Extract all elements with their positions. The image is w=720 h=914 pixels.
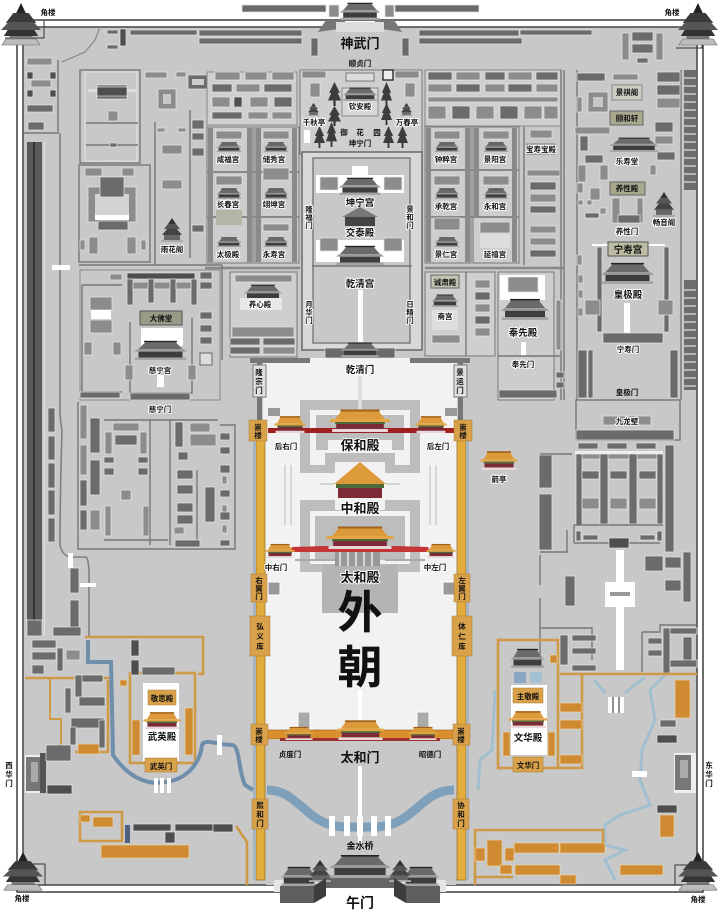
red wall north with hall: 保和殿: 后右门 [275,441,297,451]
big characters: 外朝 [337,587,383,693]
gate: 西华门: 门 [5,778,13,788]
plaque: 协和门: 和 [457,809,465,819]
plaque: 崇楼 south-east: 楼 [457,734,465,744]
western six palaces: 永寿宫 [263,249,285,259]
corner tower south-west: 角楼 [14,893,30,903]
hall: 武英殿: 武英殿 [148,731,177,743]
gate: 东华门 and neighbours: 门 [705,778,713,788]
Ningshou compound: east palace: 养性门 [616,226,638,236]
north gate: 神武门: 顺贞门 [349,58,371,68]
western six palaces [207,127,299,263]
hall: 文华殿: 文华殿 [514,732,543,744]
west area: 武英殿 [25,620,253,793]
hall: 太和殿 and terrace: 中右门 [265,562,287,572]
eastern six palaces: 永和宫 [484,201,506,211]
hall: 文华殿 [508,711,548,744]
hall: 乐寿堂 [609,138,659,166]
corner tower south-east: 角楼 [690,894,706,904]
golden corridors west and east [253,430,469,880]
western six palaces: 翊坤宫 [263,199,285,209]
side gates: 门 [305,315,313,325]
western six palaces: 储秀宫 [263,154,285,164]
养心殿 compound: 养心殿 [249,299,272,309]
gates 隆宗门 and 景运门: 隆 [255,367,263,377]
pavilion: 雨花阁 [161,218,183,254]
plaque: 崇楼 north-west [249,420,267,441]
plaque: 文华门 [513,757,543,772]
gate: 东华门 and neighbours [657,680,713,837]
imperial garden: 御花园: 御 [340,127,348,137]
plaque: 主敬殿 [513,688,543,703]
plaque: 敬思殿: 敬思殿 [151,693,174,703]
plaque: 大佛堂 [140,311,182,325]
side gates: 月 [305,300,313,309]
plaque: 大佛堂: 大佛堂 [150,313,173,323]
east side halls beside six palaces: 宝寿宝殿 [526,144,556,154]
gold plaques along the corridors [249,420,472,829]
hall: 皇极殿: 皇极殿 [614,289,643,301]
plaque: 协和门: 门 [457,818,465,828]
Ningshou compound: east palace [575,70,696,400]
side gates: 隆 [305,204,313,214]
plaque: 体仁库: 仁 [458,631,466,641]
north-east blocks [425,70,561,126]
gate: 西华门 [5,745,72,794]
plaque: 弘义库 [250,616,270,656]
inner court compound [302,152,422,350]
plaque: 景祺阁 [612,85,642,100]
plaque: 颐和轩 [610,111,643,125]
north gate: 神武门: 神武门 [340,36,380,51]
plaque: 武英门: 武英门 [150,761,172,771]
side gates: 日 [406,300,414,309]
plaque: 崇楼 south-west: 崇 [255,727,263,736]
plaque: 景祺阁: 景祺阁 [616,87,638,97]
imperial garden: 御花园: 千秋亭 [303,117,326,127]
plaque: 左翼门: 门 [458,591,466,601]
plaque: 弘义库: 库 [256,641,264,651]
plaque: 体仁库 [452,616,472,656]
plaque: 熙和门: 熙 [256,801,264,810]
south-east storehouses [475,830,663,885]
eastern six palaces: 钟粹宫 [435,154,457,164]
九龙壁 and 皇极门 compound: 九龙壁 [616,416,639,426]
side gates: 福 [305,212,313,222]
side gates [305,204,414,325]
奉先殿 compound [498,272,564,400]
corner tower south-west [3,852,45,903]
plaque: 左翼门 [454,574,470,602]
gate: 太和门 with corridor: 太和门 [340,750,380,765]
plaque: 体仁库: 体 [458,621,466,631]
九龙壁 and 皇极门 compound [539,387,680,660]
north wall row buildings [62,27,663,63]
eastern six palaces: 景阳宫 [484,154,506,164]
hall: 太和殿 and terrace: 太和殿 [340,570,380,585]
plaque: 崇楼 south-west: 楼 [255,734,263,744]
plaque: 协和门: 协 [457,800,465,810]
western six palaces: 咸福宫 [217,154,239,164]
plaque: 养性殿: 养性殿 [616,183,639,193]
red wall north with hall: 保和殿: 保和殿 [340,438,380,453]
plaque: 崇楼 north-east: 楼 [459,430,467,440]
eastern six palaces: 承乾宫 [435,201,457,211]
hall: 皇极殿 [601,263,654,301]
hall: 慈宁宫: 慈宁宫 [149,365,171,375]
plaque: 右翼门: 门 [255,591,263,601]
gate: 东华门 and neighbours: 东 [705,760,713,770]
gate: 西华门: 西 [5,761,13,770]
west wall long building [27,142,45,636]
imperial garden: 御花园: 花 [356,127,364,137]
gate: 太和门 with corridor [255,720,467,848]
gate: 乾清门: 乾清门 [346,364,374,376]
side gates: 门 [305,220,313,230]
pavilion: 箭亭: 箭亭 [492,474,507,484]
hall: 中和殿 [320,462,400,516]
plaque: 协和门 [453,799,469,829]
south-west compound [78,402,235,549]
plaque: 右翼门: 翼 [255,584,263,593]
golden river and bridges [267,790,454,851]
imperial garden: 御花园 [300,70,422,154]
pavilion: 箭亭 [480,451,518,484]
plaque: 崇楼 north-east [454,420,472,441]
outer court marble terrace [263,358,457,740]
hall: 慈宁宫 [134,341,187,375]
imperial garden: 御花园: 坤宁门 [349,138,371,148]
side gates: 精 [406,307,414,317]
gates 隆宗门 and 景运门: 门 [456,385,464,395]
imperial garden: 御花园: 园 [373,128,381,137]
gates 隆宗门 and 景运门: 门 [255,385,263,395]
plaque: 养性殿 [610,182,645,195]
hall: 交泰殿: 交泰殿 [346,227,375,239]
corner tower north-east [664,3,718,48]
hall: 乾清宫 [320,238,402,290]
golden river and bridges: 金水桥 [346,840,374,851]
gate: 乾清门 [325,343,395,376]
eastern six palaces: 延禧宫 [484,249,506,259]
side gates: 景 [406,205,414,214]
gates 隆宗门 and 景运门: 运 [456,377,464,386]
plaque: 左翼门: 左 [458,575,466,585]
九龙壁 and 皇极门 compound: 皇极门 [616,387,638,397]
east area: 文华殿 [478,640,697,880]
诚肃殿 and 斋宫 compound: 斋宫 [438,311,452,321]
gate: 东华门 and neighbours: 华 [705,769,713,779]
plaque: 宁寿宫 [608,242,648,256]
corner tower north-west [1,3,56,45]
hall: 武英殿 [143,712,181,743]
plaque: 左翼门: 翼 [458,584,466,593]
plaque: 熙和门: 和 [256,809,264,819]
east blocks near 文渊阁 [560,552,697,673]
奉先殿 compound: 奉先殿 [509,327,538,339]
corner tower north-east: 角楼 [664,7,680,17]
eastern six palaces [425,127,519,263]
plaque: 右翼门 [251,574,267,602]
plaque: 崇楼 north-east: 崇 [459,423,467,432]
hall: 太和殿 and terrace: 中左门 [424,562,446,572]
pavilion: 畅音阁: 畅音阁 [653,217,675,227]
western six palaces: 太极殿 [217,249,240,259]
north-west compounds [24,58,208,636]
east side halls beside six palaces [79,70,564,400]
pavilion: 雨花阁: 雨花阁 [161,244,183,254]
red wall north with hall: 保和殿: 后左门 [427,441,449,451]
养心殿 compound [230,272,297,357]
north blocks above western six palaces [207,72,297,125]
north gate: 神武门 [242,3,479,68]
side gates: 门 [406,315,414,325]
plaque: 敬思殿 [148,690,176,705]
gates 隆宗门 and 景运门 [250,358,470,423]
plaque: 熙和门: 门 [256,818,264,828]
plaque: 崇楼 north-west: 崇 [254,423,262,432]
gates 隆宗门 and 景运门: 宗 [255,376,263,386]
plaque: 右翼门: 右 [255,575,263,585]
side gates: 华 [305,307,313,317]
stele monument [605,550,635,670]
corner tower north-west: 角楼 [40,7,56,17]
imperial garden: 御花园: 万春亭 [396,117,419,127]
western six palaces: 长春宫 [217,199,239,209]
central court lower ground [266,740,456,885]
plaque: 体仁库: 库 [458,641,466,651]
plaque: 武英门 [145,758,177,772]
plaque: 文华门: 文华门 [517,760,539,770]
big characters: 外朝: 朝 [337,642,383,693]
hall: 中和殿: 中和殿 [340,501,380,516]
side gates: 和 [406,212,414,222]
eastern six palaces: 景仁宫 [435,249,457,259]
big characters: 外朝: 外 [337,587,383,638]
Ningshou compound: east palace: 宁寿门 [617,344,639,354]
corner tower south-east [675,852,718,904]
plaque: 主敬殿: 主敬殿 [517,691,540,701]
gate: 太和门 with corridor: 昭德门 [419,749,441,759]
hall: 坤宁宫 [320,177,402,209]
hall: 坤宁宫: 坤宁宫 [346,197,374,209]
hall: 太和殿 and terrace [265,526,456,585]
pavilion: 畅音阁 [653,192,675,227]
gates 隆宗门 and 景运门: 景 [456,368,464,377]
plaque: 熙和门 [252,799,268,829]
hall: 乐寿堂: 乐寿堂 [616,156,639,166]
hall: 交泰殿 [342,207,378,239]
south gate: 午门 [274,855,446,914]
side gates: 门 [406,220,414,230]
慈宁宫 compound: 慈宁门 [149,404,171,414]
imperial garden: 御花园: 钦安殿 [349,101,372,111]
plaque: 崇楼 south-east: 崇 [457,727,465,736]
plaque: 弘义库: 弘 [256,621,264,631]
plaque: 颐和轩: 颐和轩 [616,113,639,123]
plaque: 宁寿宫: 宁寿宫 [614,244,642,256]
gate: 西华门: 华 [5,769,13,779]
south gate: 午门: 午门 [346,895,374,911]
plaque: 崇楼 south-west [251,724,268,745]
plaque: 崇楼 south-east [453,724,470,745]
south-west storehouses [80,812,247,885]
red wall north with hall: 保和殿 [268,410,454,453]
hall: 乾清宫: 乾清宫 [346,278,374,290]
gate: 太和门 with corridor: 贞度门 [279,749,301,759]
plaque: 弘义库: 义 [256,632,264,641]
plaque: 崇楼 north-west: 楼 [254,430,262,440]
诚肃殿 and 斋宫 compound: 诚肃殿 [434,277,457,287]
诚肃殿 and 斋宫 compound [425,272,495,356]
奉先殿 compound: 奉先门 [512,359,534,369]
慈宁宫 compound [80,270,220,414]
